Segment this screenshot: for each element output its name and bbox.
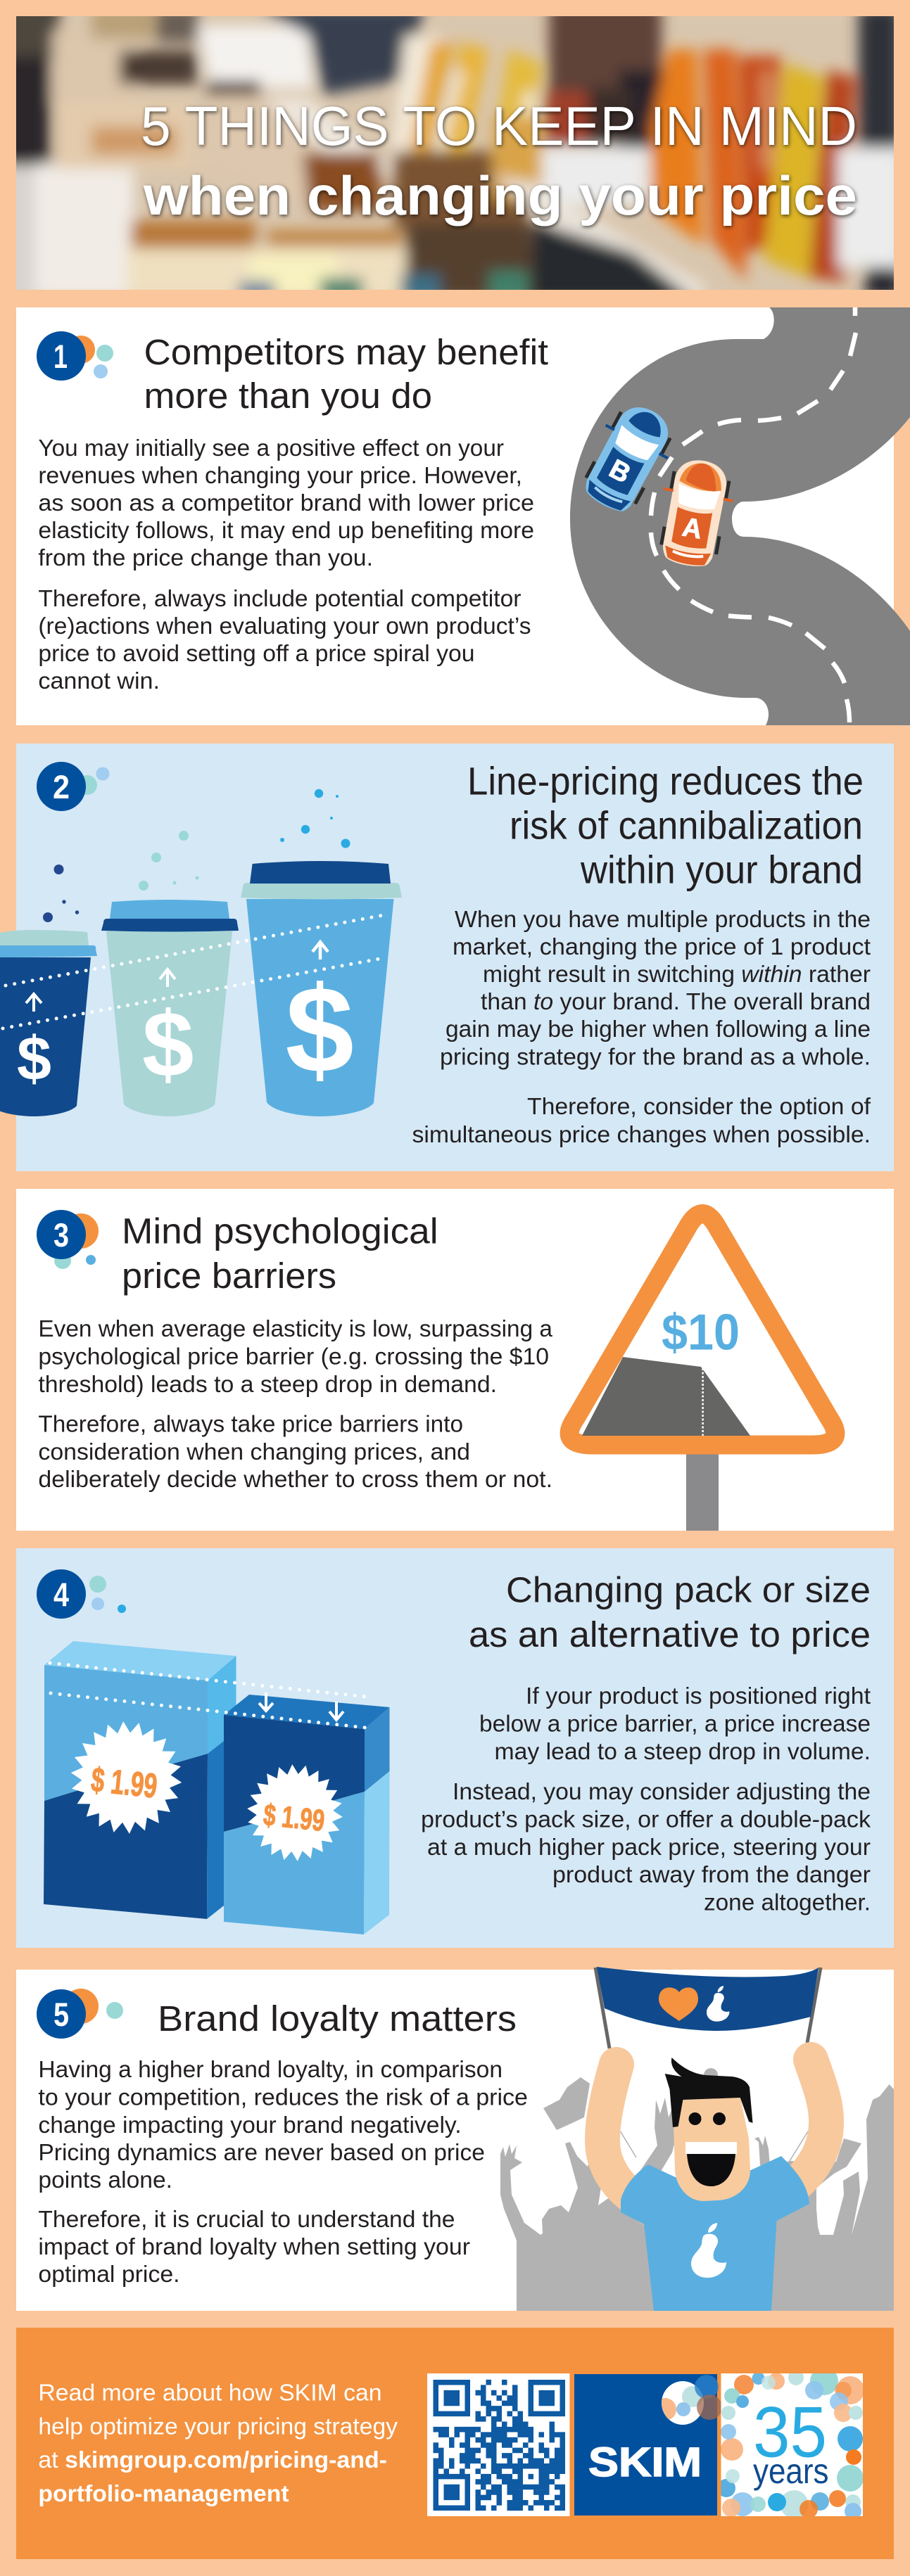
body text 3: Therefore, always take price barriers into <box>38 1411 463 1437</box>
badge 5 <box>37 1989 123 2039</box>
panel 1: competitors <box>16 307 910 725</box>
footer text <box>38 2380 398 2506</box>
badge 4 <box>37 1569 126 1619</box>
body text 3 <box>38 1315 553 1492</box>
heading 2: risk of cannibalization <box>510 803 863 848</box>
body text 3: deliberately decide whether to cross them or not. <box>38 1466 552 1492</box>
heading 3: price barriers <box>122 1256 336 1296</box>
badge 2 <box>37 762 110 811</box>
SKIM logo <box>574 2374 722 2516</box>
cup 1: $ <box>17 1024 51 1093</box>
fan character <box>602 2058 826 2311</box>
body text 5: change impacting your brand negatively. <box>38 2112 462 2138</box>
body text 5: Therefore, it is crucial to understand the <box>38 2206 455 2232</box>
title <box>141 95 857 227</box>
body text 2 <box>412 906 871 1147</box>
heart icon <box>659 1987 698 2021</box>
body text 5: impact of brand loyalty when setting your <box>38 2233 470 2259</box>
panel 2: line pricing <box>0 744 894 1171</box>
heading 4: Changing pack or size <box>506 1570 871 1610</box>
body text 1: as soon as a competitor brand with lower price <box>38 490 534 516</box>
pack boxes illustration <box>44 1641 390 1934</box>
heading 4: as an alternative to price <box>469 1614 871 1654</box>
heading 1: more than you do <box>144 376 432 416</box>
crowd silhouette <box>500 2068 894 2311</box>
body text 3: psychological price barrier (e.g. crossing the $10 <box>38 1344 549 1370</box>
body text 4 <box>421 1683 871 1915</box>
heading 1: Competitors may benefit <box>144 332 548 372</box>
eyes <box>688 2112 726 2125</box>
badge 1: 1 <box>53 338 68 375</box>
35 years badge: 35 <box>753 2392 827 2473</box>
confetti bubbles <box>717 2367 864 2520</box>
body text 4: Instead, you may consider adjusting the <box>453 1778 871 1804</box>
small box <box>224 1695 390 1934</box>
body text 5: to your competition, reduces the risk of a price <box>38 2084 528 2110</box>
body text 5 <box>38 2056 528 2287</box>
hair <box>665 2058 753 2127</box>
panel 5: brand loyalty <box>16 1967 894 2311</box>
car B: B <box>605 454 636 490</box>
heading 5: Brand loyalty matters <box>158 1998 517 2039</box>
road illustration <box>570 307 910 725</box>
SKIM logo: SKIM <box>588 2440 702 2485</box>
face <box>674 2098 750 2201</box>
body text 3: consideration when changing prices, and <box>38 1439 470 1465</box>
title: when changing your price <box>143 165 857 227</box>
body text 4: product away from the danger <box>552 1861 871 1887</box>
body text 1: (re)actions when evaluating your own product’s <box>38 613 531 639</box>
body text 2: When you have multiple products in the <box>455 906 871 932</box>
body text 2: might result in switching within rather <box>483 961 871 987</box>
body text 2: pricing strategy for the brand as a whole. <box>440 1044 871 1069</box>
cups illustration <box>0 789 402 1116</box>
badge 5: 5 <box>53 1996 69 2033</box>
cup 1 <box>0 930 97 1116</box>
cup 3 <box>241 861 402 1116</box>
35 years badge <box>717 2367 864 2520</box>
pear icon on shirt <box>691 2223 726 2278</box>
footer text: portfolio-management <box>38 2480 289 2506</box>
small box: $ 1.99 <box>262 1798 326 1838</box>
heading 3: Mind psychological <box>122 1211 438 1251</box>
body text 5: Pricing dynamics are never based on price <box>38 2139 485 2165</box>
body text 4: may lead to a steep drop in volume. <box>494 1738 871 1764</box>
35 years badge: years <box>753 2451 829 2491</box>
heading 4 <box>469 1570 871 1654</box>
arms <box>602 2060 826 2209</box>
footer text: help optimize your pricing strategy <box>38 2413 398 2440</box>
blurred shelf photo <box>16 16 894 290</box>
cup 2 <box>101 900 239 1116</box>
body text 2: market, changing the price of 1 product <box>453 933 871 959</box>
title: 5 THINGS TO KEEP IN MIND <box>141 95 857 157</box>
heading 3 <box>122 1211 438 1296</box>
footer text: at skimgroup.com/pricing-and- <box>38 2447 387 2473</box>
body text 2: gain may be higher when following a line <box>445 1016 871 1042</box>
body text 1: revenues when changing your price. However, <box>38 462 522 488</box>
pear icon on banner <box>707 1986 729 2022</box>
car B <box>572 395 684 521</box>
road sign icon: $10 <box>662 1304 740 1360</box>
QR code <box>427 2373 569 2516</box>
body text 1: elasticity follows, it may end up benefiting more <box>38 517 534 543</box>
heading 2: within your brand <box>580 848 863 892</box>
badge 4: 4 <box>53 1576 69 1613</box>
t-shirt <box>621 2156 809 2311</box>
body text 4: at a much higher pack price, steering your <box>427 1834 871 1860</box>
mouth <box>685 2142 737 2186</box>
body text 1: from the price change than you. <box>38 544 373 570</box>
banner <box>595 1967 821 2048</box>
body text 3: Even when average elasticity is low, surpassing a <box>38 1315 553 1341</box>
badge 3: 3 <box>53 1216 69 1254</box>
heading 1 <box>144 332 548 416</box>
body text 1: Therefore, always include potential competitor <box>38 585 522 611</box>
badge 1 <box>37 331 113 381</box>
badge 2: 2 <box>53 768 70 805</box>
body text 2: Therefore, consider the option of <box>527 1093 871 1119</box>
body text 1: cannot win. <box>38 668 160 694</box>
panel 4: pack size <box>16 1548 894 1948</box>
panel 3: price barriers <box>16 1189 894 1531</box>
panel: footer call to action <box>16 2328 894 2559</box>
body text 5: Having a higher brand loyalty, in comparison <box>38 2056 503 2082</box>
big box <box>44 1641 236 1919</box>
body text 2: than to your brand. The overall brand <box>481 988 871 1014</box>
cup 3: $ <box>286 962 354 1099</box>
down arrows <box>259 1692 343 1720</box>
panel: hero header <box>16 16 894 290</box>
car A <box>651 454 739 571</box>
heading 2: Line-pricing reduces the <box>467 759 864 803</box>
road sign icon <box>569 1214 835 1531</box>
body text 4: below a price barrier, a price increase <box>479 1711 871 1736</box>
body text 2: simultaneous price changes when possible. <box>412 1121 871 1147</box>
footer text: Read more about how SKIM can <box>38 2380 382 2406</box>
body text 5: optimal price. <box>38 2261 180 2287</box>
badge 3 <box>37 1210 99 1269</box>
body text 3: threshold) leads to a steep drop in demand. <box>38 1371 497 1397</box>
heading 2 <box>467 759 864 892</box>
cup 2: $ <box>142 993 194 1096</box>
dotted size lines <box>50 1663 365 1728</box>
body text 1: price to avoid setting off a price spiral you <box>38 640 474 666</box>
body text 4: product’s pack size, or offer a double-pack <box>421 1806 871 1832</box>
body text 4: zone altogether. <box>704 1889 871 1915</box>
body text 4: If your product is positioned right <box>526 1683 871 1709</box>
steam dots <box>43 789 350 922</box>
body text 5: points alone. <box>38 2167 172 2193</box>
dotted trend lines <box>3 914 387 1028</box>
body text 1: You may initially see a positive effect on your <box>38 435 504 461</box>
car A: A <box>680 513 704 545</box>
body text 1 <box>38 435 534 694</box>
big box: $ 1.99 <box>89 1761 159 1806</box>
